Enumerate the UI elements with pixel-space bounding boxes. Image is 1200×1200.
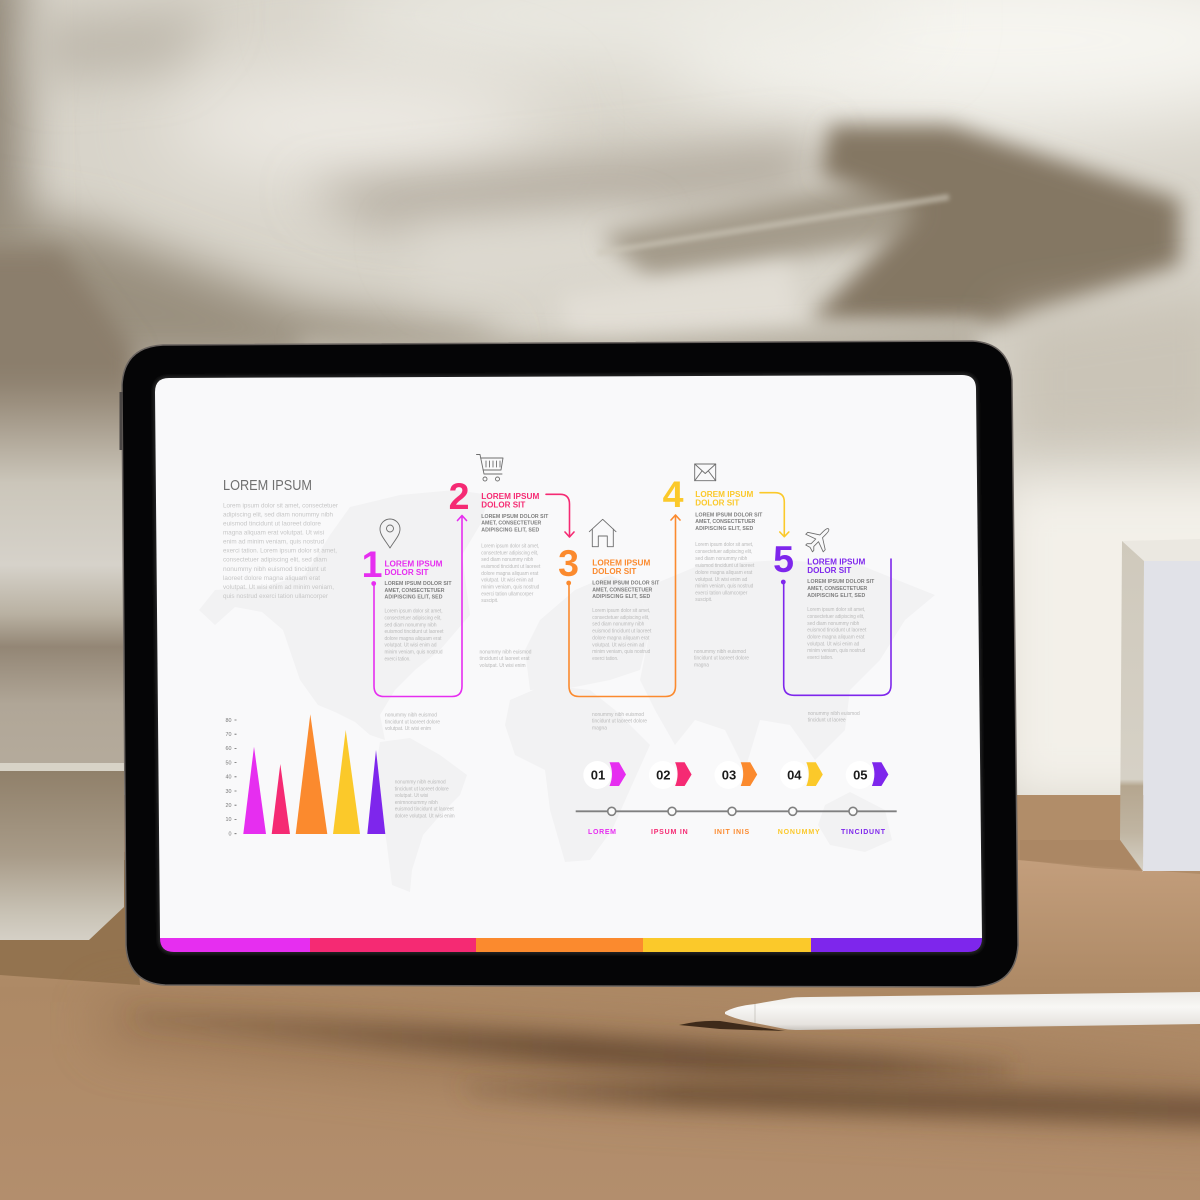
timeline badge 04: 04 bbox=[787, 768, 802, 783]
paragraph 1 bbox=[384, 608, 444, 662]
paragraph 2: dolore magna aliquam erat bbox=[481, 571, 539, 577]
chart note: nonummy nibh euismod bbox=[395, 780, 446, 786]
timeline labels: LOREM bbox=[588, 829, 616, 836]
paragraph 5: euismod tincidunt ut laoreet bbox=[807, 628, 867, 634]
paragraph 5: minim veniam, quis nostrud bbox=[807, 648, 865, 654]
bar 4 bbox=[333, 730, 360, 834]
heading 4: DOLOR SIT bbox=[695, 498, 740, 508]
subheading 1: ADIPISCING ELIT, SED bbox=[384, 595, 443, 601]
paragraph 3: Lorem ipsum dolor sit amet, bbox=[592, 608, 650, 614]
paragraph 2: exerci tation ullamcorper bbox=[481, 592, 534, 598]
timeline badge 05 bbox=[846, 761, 888, 789]
chart axis labels bbox=[226, 718, 236, 838]
heading 2 bbox=[482, 493, 539, 508]
paragraph 5: sed diam nonummy nibh bbox=[807, 621, 859, 627]
paragraph 5 bbox=[807, 607, 867, 661]
note 4: nonummy nibh euismod bbox=[694, 649, 746, 655]
note 2: tincidunt ut laoreet erat bbox=[480, 656, 530, 662]
paragraph 4: sed diam nonummy nibh bbox=[695, 556, 747, 562]
note 2 bbox=[480, 650, 532, 669]
step 4 bbox=[663, 464, 789, 668]
heading 3 bbox=[592, 560, 650, 574]
heading 5 bbox=[807, 556, 865, 575]
timeline labels: TINCIDUNT bbox=[841, 829, 886, 836]
paragraph 4: volutpat. Ut wisi enim ad bbox=[695, 577, 747, 583]
subheading 2: ADIPISCING ELIT, SED bbox=[481, 528, 540, 534]
paragraph 2: volutpat. Ut wisi enim ad bbox=[481, 578, 533, 584]
paragraph 4: dolore magna aliquam erat bbox=[695, 570, 753, 576]
subheading 5: ADIPISCING ELIT, SED bbox=[807, 593, 866, 599]
subheading 2 bbox=[481, 514, 549, 534]
timeline labels: INIT INIS bbox=[714, 829, 750, 836]
paragraph 2: consectetuer adipiscing elit, bbox=[481, 550, 538, 556]
subheading 3: LOREM IPSUM DOLOR SIT bbox=[592, 580, 660, 586]
timeline badge 05: 05 bbox=[853, 768, 868, 783]
paragraph 2: Lorem ipsum dolor sit amet, bbox=[481, 544, 539, 550]
note 3: nonummy nibh euismod bbox=[592, 712, 644, 718]
note 3: tincidunt ut laoreet dolore bbox=[592, 719, 647, 725]
paragraph 3: dolore magna aliquam erat bbox=[592, 636, 650, 642]
paragraph 3: consectetuer adipiscing elit, bbox=[592, 615, 649, 621]
bar 1 bbox=[243, 747, 266, 834]
paragraph 4: euismod tincidunt ut laoreet bbox=[695, 563, 755, 569]
subheading 1: AMET, CONSECTETUER bbox=[384, 588, 445, 594]
paragraph 3: sed diam nonummy nibh bbox=[592, 622, 644, 628]
intro paragraph: volutpat. Ut wisi enim ad minim veniam, bbox=[223, 584, 334, 591]
intro paragraph: exerci tation. Lorem ipsum dolor sit amet, bbox=[223, 548, 337, 554]
number 4: 4 bbox=[663, 473, 684, 515]
world map background bbox=[199, 490, 935, 892]
subheading 5: LOREM IPSUM DOLOR SIT bbox=[807, 579, 875, 585]
step 1 bbox=[362, 516, 466, 732]
paragraph 1: minim veniam, quis nostrud bbox=[384, 649, 443, 655]
connector 5 bbox=[782, 559, 891, 695]
note 1: volutpat. Ut wisi enim bbox=[385, 726, 432, 732]
intro paragraph: adipiscing elit, sed diam nonummy nibh bbox=[223, 512, 333, 518]
paragraph 4: exerci tation ullamcorper bbox=[695, 590, 748, 596]
timeline badge 03 bbox=[714, 761, 757, 789]
step 2 bbox=[449, 454, 574, 669]
chart note bbox=[395, 780, 455, 819]
intro paragraph: laoreet dolore magna aliquam erat bbox=[223, 575, 320, 582]
number 3: 3 bbox=[558, 542, 579, 584]
number 5: 5 bbox=[773, 538, 794, 580]
paragraph 2: sed diam nonummy nibh bbox=[481, 557, 533, 563]
intro paragraph: enim ad minim veniam, quis nostrud bbox=[223, 538, 324, 546]
intro paragraph: consectetuer adipiscing elit, sed diam bbox=[223, 556, 327, 564]
chart note: dolore volutpat. Ut wisi enim bbox=[395, 813, 455, 819]
chart note: enimnonummy nibh bbox=[395, 800, 438, 806]
subheading 5 bbox=[807, 579, 875, 599]
note 1: tincidunt ut laoreet dolore bbox=[385, 719, 440, 725]
tablet screen bbox=[150, 370, 990, 960]
intro paragraph: euismod tincidunt ut laoreet dolore bbox=[223, 520, 321, 528]
subheading 3: ADIPISCING ELIT, SED bbox=[592, 594, 651, 600]
subheading 5: AMET, CONSECTETUER bbox=[807, 586, 868, 592]
chart axis labels: 70 bbox=[226, 732, 232, 738]
chart axis labels: 60 bbox=[226, 746, 232, 752]
number 2: 2 bbox=[449, 475, 469, 517]
heading 1: DOLOR SIT bbox=[384, 567, 429, 577]
bottom colour bar bbox=[150, 938, 986, 954]
timeline labels: IPSUM IN bbox=[651, 829, 688, 836]
paragraph 4 bbox=[695, 542, 755, 603]
chart axis labels: 40 bbox=[226, 775, 232, 781]
tablet body bbox=[120, 341, 1018, 987]
heading 2: LOREM IPSUM bbox=[481, 491, 539, 501]
background: wall with blurred leaf shadows bbox=[0, 0, 1200, 800]
intro paragraph: Lorem ipsum dolor sit amet, consectetuer bbox=[223, 502, 339, 510]
paragraph 2: minim veniam, quis nostrud bbox=[481, 584, 539, 590]
step 3 bbox=[558, 515, 680, 732]
paragraph 5: Lorem ipsum dolor sit amet, bbox=[807, 607, 865, 613]
paragraph 1: volutpat. Ut wisi enim ad bbox=[384, 643, 437, 649]
paragraph 1: sed diam nonummy nibh bbox=[384, 622, 437, 628]
arrow 2 bbox=[546, 494, 574, 537]
subheading 2: AMET, CONSECTETUER bbox=[481, 521, 542, 527]
paragraph 4: consectetuer adipiscing elit, bbox=[695, 549, 752, 555]
note 5: nonummy nibh euismod bbox=[808, 711, 860, 717]
paragraph 2 bbox=[481, 544, 541, 604]
bar 2 bbox=[272, 764, 290, 834]
note 5 bbox=[808, 711, 860, 724]
heading 3: LOREM IPSUM bbox=[592, 558, 650, 568]
chart axis labels: 20 bbox=[226, 803, 232, 809]
subheading 1: LOREM IPSUM DOLOR SIT bbox=[384, 581, 452, 587]
heading 1 bbox=[385, 560, 442, 575]
paragraph 3: exerci tation. bbox=[592, 656, 618, 662]
paragraph 1: euismod tincidunt ut laoreet bbox=[384, 629, 444, 635]
note 4: tincidunt ut laoreet dolore bbox=[694, 656, 749, 662]
note 2: volutpat. Ut wisi enim bbox=[480, 663, 526, 669]
heading 4 bbox=[695, 489, 753, 508]
timeline badge 01 bbox=[583, 761, 626, 789]
paragraph 1: exerci tation. bbox=[384, 656, 410, 662]
intro paragraph: nonummy nibh euismod tincidunt ut bbox=[223, 566, 326, 573]
icon: house bbox=[589, 519, 616, 547]
timeline labels: NONUMMY bbox=[778, 829, 820, 836]
paragraph 5: consectetuer adipiscing elit, bbox=[807, 614, 864, 620]
chart axis labels: 0 bbox=[228, 832, 232, 838]
subheading 4: LOREM IPSUM DOLOR SIT bbox=[695, 512, 763, 518]
intro paragraph: magna aliquam erat volutpat. Ut wisi bbox=[223, 530, 324, 536]
icon: shopping cart bbox=[476, 454, 503, 481]
chart axis labels: 80 bbox=[226, 718, 232, 724]
paragraph 1: consectetuer adipiscing elit, bbox=[384, 615, 442, 621]
icon: location pin bbox=[380, 519, 400, 548]
chart note: euismod tincidunt ut laoreet bbox=[395, 807, 454, 813]
heading 1: LOREM IPSUM bbox=[384, 558, 442, 568]
paragraph 1: dolore magna aliquam erat bbox=[384, 636, 442, 642]
note 1: nonummy nibh euismod bbox=[385, 712, 437, 718]
heading 3: DOLOR SIT bbox=[592, 566, 637, 576]
marble block left bbox=[0, 763, 124, 940]
subheading 4 bbox=[695, 512, 763, 532]
chart note: tincidunt ut laoreet dolore bbox=[395, 786, 449, 792]
connector 1 bbox=[372, 516, 466, 696]
icon: airplane bbox=[800, 520, 837, 557]
subheading 1 bbox=[384, 581, 452, 601]
connector 3 bbox=[567, 515, 680, 696]
main heading: LOREM IPSUM bbox=[223, 478, 312, 494]
note 2: nonummy nibh euismod bbox=[480, 650, 532, 656]
chart axis labels: 10 bbox=[226, 817, 232, 823]
subheading 4: ADIPISCING ELIT, SED bbox=[695, 526, 754, 532]
heading 5: DOLOR SIT bbox=[807, 565, 852, 575]
bar chart: triangle bars bbox=[226, 714, 385, 838]
timeline badge 02: 02 bbox=[656, 768, 671, 783]
step 5 bbox=[773, 520, 891, 724]
note 3: magna bbox=[592, 726, 607, 732]
timeline badge 01: 01 bbox=[591, 768, 605, 783]
paragraph 3: volutpat. Ut wisi enim ad bbox=[592, 642, 644, 648]
subheading 2: LOREM IPSUM DOLOR SIT bbox=[481, 514, 549, 520]
timeline labels bbox=[588, 829, 886, 836]
heading 5: LOREM IPSUM bbox=[807, 556, 865, 566]
note 4 bbox=[694, 649, 749, 668]
timeline badge 02 bbox=[649, 761, 692, 789]
paragraph 2: euismod tincidunt ut laoreet bbox=[481, 564, 541, 570]
paragraph 2: suscipit. bbox=[481, 598, 498, 604]
note 5: tincidunt ut laoree bbox=[808, 718, 846, 724]
intro paragraph: quis nostrud exerci tation ullamcorper bbox=[223, 593, 329, 600]
note 3 bbox=[592, 712, 647, 732]
timeline axis bbox=[576, 807, 897, 815]
subheading 3 bbox=[592, 580, 660, 600]
paragraph 5: exerci tation. bbox=[807, 655, 833, 661]
paragraph 3: minim veniam, quis nostrud bbox=[592, 649, 650, 655]
paragraph 3: euismod tincidunt ut laoreet bbox=[592, 629, 652, 635]
chart axis labels: 50 bbox=[226, 760, 232, 766]
stylus pencil bbox=[679, 992, 1200, 1031]
paragraph 4: Lorem ipsum dolor sit amet, bbox=[695, 542, 753, 548]
background: table surface bbox=[0, 795, 1200, 1200]
chart axis labels: 30 bbox=[226, 789, 232, 795]
timeline badge 03: 03 bbox=[722, 768, 736, 783]
paragraph 4: minim veniam, quis nostrud bbox=[695, 584, 753, 590]
chart note: volutpat. Ut wisi bbox=[395, 793, 428, 799]
heading 2: DOLOR SIT bbox=[481, 500, 526, 510]
paragraph 1: Lorem ipsum dolor sit amet, bbox=[384, 608, 442, 614]
note 1 bbox=[385, 712, 440, 732]
bar 5 bbox=[367, 750, 385, 834]
bar 3 bbox=[296, 714, 327, 834]
heading 4: LOREM IPSUM bbox=[695, 489, 753, 499]
paragraph 4: suscipit. bbox=[695, 597, 712, 603]
arrow 4 bbox=[760, 493, 789, 537]
paragraph 3 bbox=[592, 608, 652, 662]
paragraph 5: dolore magna aliquam erat bbox=[807, 634, 865, 640]
icon: envelope bbox=[695, 464, 716, 481]
paragraph 5: volutpat. Ut wisi enim ad bbox=[807, 642, 859, 648]
subheading 3: AMET, CONSECTETUER bbox=[592, 587, 653, 593]
timeline bbox=[576, 761, 897, 836]
note 4: magna bbox=[694, 662, 709, 668]
intro paragraph bbox=[223, 502, 339, 600]
timeline badge 04 bbox=[780, 761, 823, 789]
number 1: 1 bbox=[362, 543, 382, 585]
marble block right bbox=[1020, 539, 1200, 872]
subheading 4: AMET, CONSECTETUER bbox=[695, 519, 756, 525]
